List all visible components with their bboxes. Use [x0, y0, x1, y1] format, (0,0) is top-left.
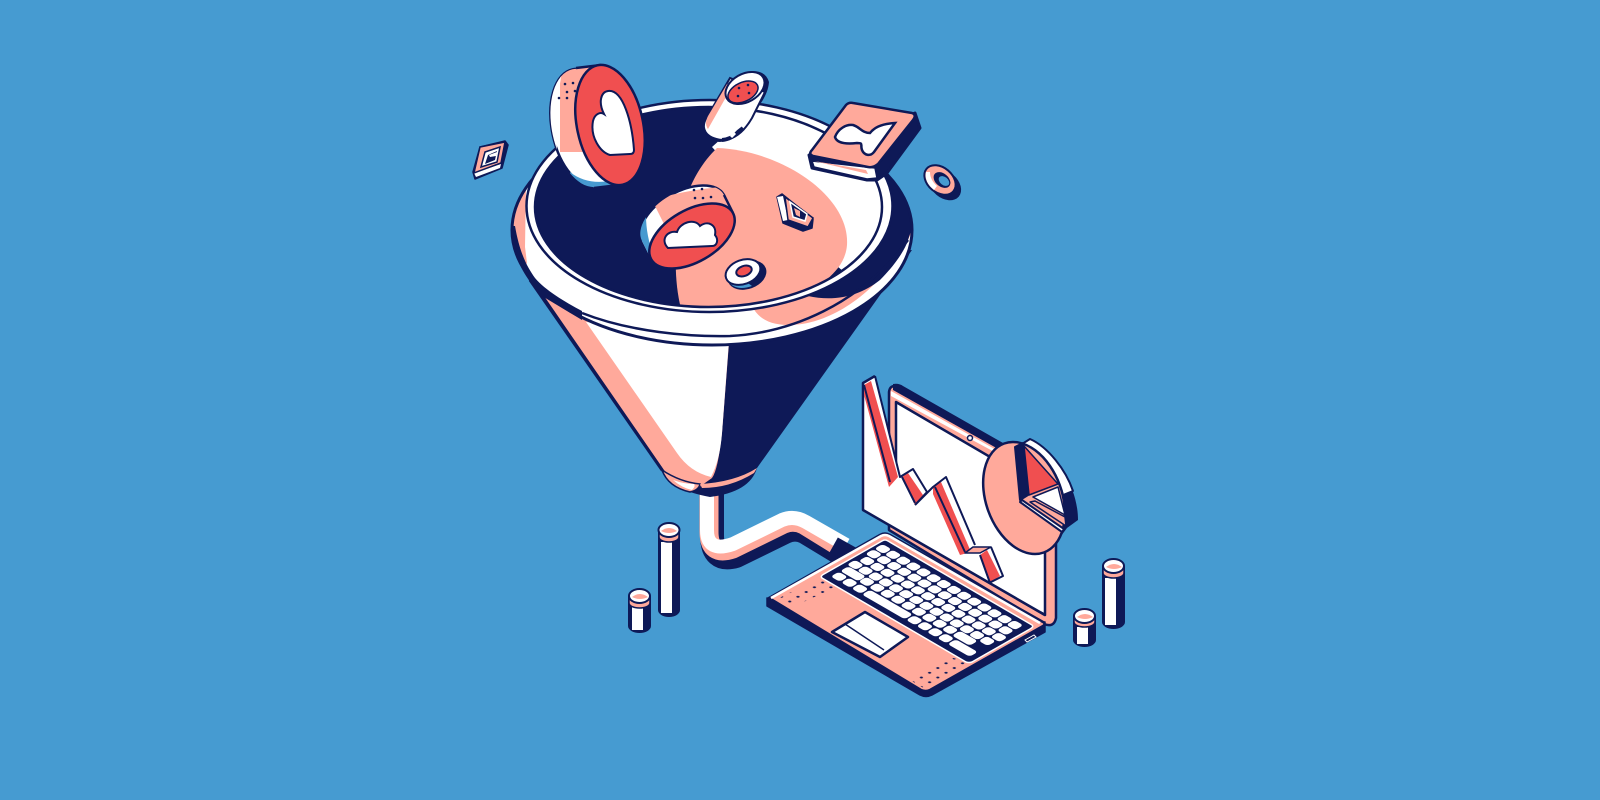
token: social tile — [809, 103, 920, 180]
funnel — [505, 95, 925, 497]
pipe from funnel to laptop — [707, 490, 876, 575]
funnel rim — [526, 100, 892, 312]
funnel collar — [510, 174, 914, 346]
laptop lid — [889, 384, 1056, 625]
token: cloud disc — [640, 184, 736, 270]
touchpad — [832, 612, 908, 657]
token: small diamond left — [473, 141, 508, 179]
funnel bowl interior — [534, 106, 884, 308]
cylinder: tall right — [1102, 559, 1125, 629]
funnel cone — [530, 250, 912, 497]
chart panel behind the arrow — [863, 376, 1045, 615]
keyboard — [821, 540, 1033, 662]
laptop — [767, 376, 1056, 696]
token: small diamond centre — [777, 194, 813, 231]
pie chart — [968, 431, 1080, 565]
laptop base — [767, 534, 1045, 696]
token: heart disc — [549, 64, 644, 188]
illustration: funnel, laptop and tokens — [472, 64, 1125, 698]
token: usb stick — [704, 65, 770, 142]
cylinder: short left — [628, 589, 651, 633]
token: ring centre — [722, 255, 771, 295]
cylinder: short right — [1073, 609, 1096, 647]
falling red arrow chart — [864, 376, 1003, 583]
cylinder: tall left — [658, 523, 680, 617]
token: ring right — [919, 159, 967, 207]
